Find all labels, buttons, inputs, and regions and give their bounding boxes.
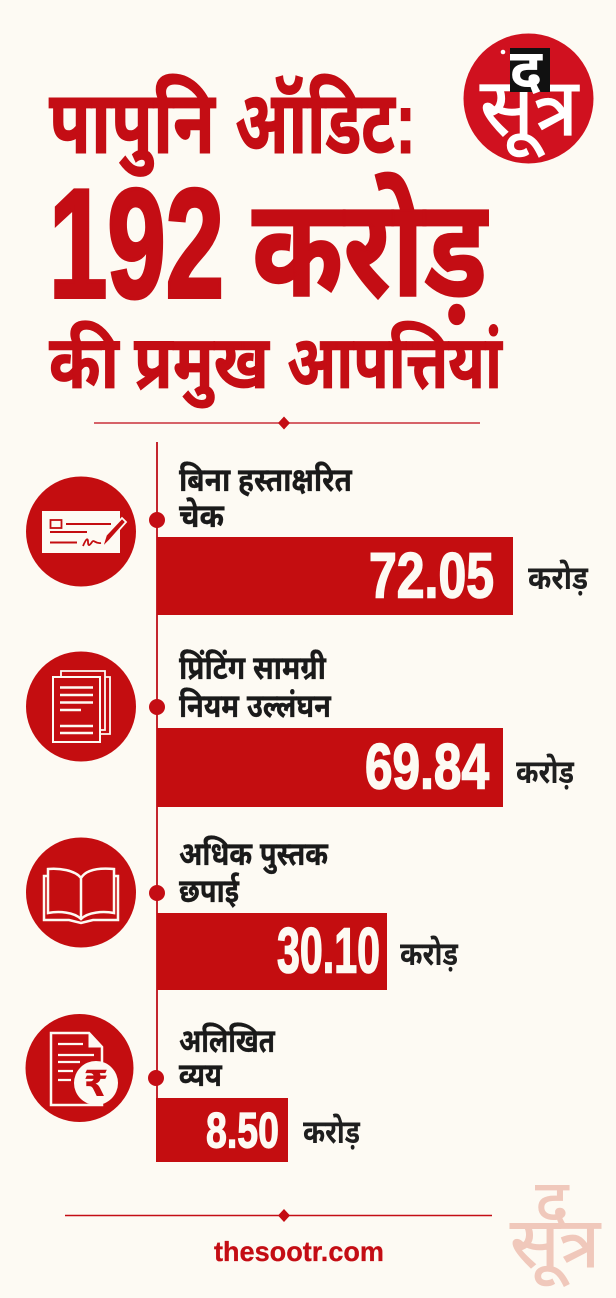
icon: open book <box>26 838 136 948</box>
title divider <box>94 416 480 430</box>
timeline dot 1 <box>149 512 165 528</box>
unit 4: करोड़ <box>303 1113 361 1150</box>
title line 3: प्रमुख <box>134 320 270 409</box>
item 4: unrecorded expenses <box>26 1014 361 1162</box>
title line 2: करोड़ <box>252 172 489 326</box>
value 4: 8.50 <box>206 1102 279 1158</box>
title line 1: पापुनि <box>49 73 216 177</box>
label 3 <box>179 835 328 909</box>
value 2: 69.84 <box>365 730 489 802</box>
value 3: 30.10 <box>277 914 380 986</box>
footer divider <box>65 1209 492 1222</box>
icon: document with rupee <box>26 1014 134 1122</box>
timeline dot 3 <box>149 885 165 901</box>
bar 1 <box>157 537 513 615</box>
watermark logo: द <box>536 1169 570 1238</box>
label 4: अलिखित <box>179 1022 275 1059</box>
bar 4 <box>156 1098 288 1162</box>
label 1: चेक <box>179 496 225 534</box>
timeline axis <box>156 442 158 1162</box>
unit 3: करोड़ <box>400 935 459 972</box>
item 2: printing material <box>26 649 575 807</box>
watermark logo <box>510 1169 601 1287</box>
title line 2 <box>49 157 489 330</box>
bar 2 <box>157 728 503 807</box>
title line 2: 192 <box>49 157 224 330</box>
item 3: extra book printing <box>26 835 459 990</box>
watermark logo: सूत्र <box>510 1204 601 1287</box>
bar 3 <box>157 913 387 990</box>
label 1 <box>179 461 352 534</box>
label 4 <box>178 1022 275 1093</box>
icon: cheque <box>26 476 136 586</box>
logo: the sootr badge: सूत्र <box>480 63 580 157</box>
label 4: व्यय <box>178 1056 223 1093</box>
title line 1: ऑडिट: <box>235 73 416 172</box>
label 3: अधिक पुस्तक <box>179 835 328 875</box>
item 1: unsigned cheques <box>26 461 589 615</box>
title line 3 <box>49 320 503 409</box>
label 1: बिना हस्ताक्षरित <box>179 461 352 498</box>
title line 3: आपत्तियां <box>287 320 503 404</box>
icon: documents <box>26 652 136 762</box>
timeline dot 4 <box>148 1070 164 1086</box>
value 1: 72.05 <box>369 540 494 612</box>
footer website: thesootr.com <box>214 1236 384 1267</box>
label 2 <box>179 649 332 724</box>
timeline dot 2 <box>149 699 165 715</box>
logo: the sootr badge <box>464 34 594 164</box>
logo: the sootr badge: द <box>510 38 543 103</box>
label 2: नियम उल्लंघन <box>179 687 332 724</box>
title line 1 <box>49 73 416 177</box>
label 3: छपाई <box>179 872 240 909</box>
title line 3: की <box>49 320 121 404</box>
label 2: प्रिंटिंग सामग्री <box>179 649 327 686</box>
icon: document with rupee: ₹ <box>83 1064 109 1105</box>
unit 2: करोड़ <box>516 753 575 790</box>
unit 1: करोड़ <box>528 559 589 596</box>
